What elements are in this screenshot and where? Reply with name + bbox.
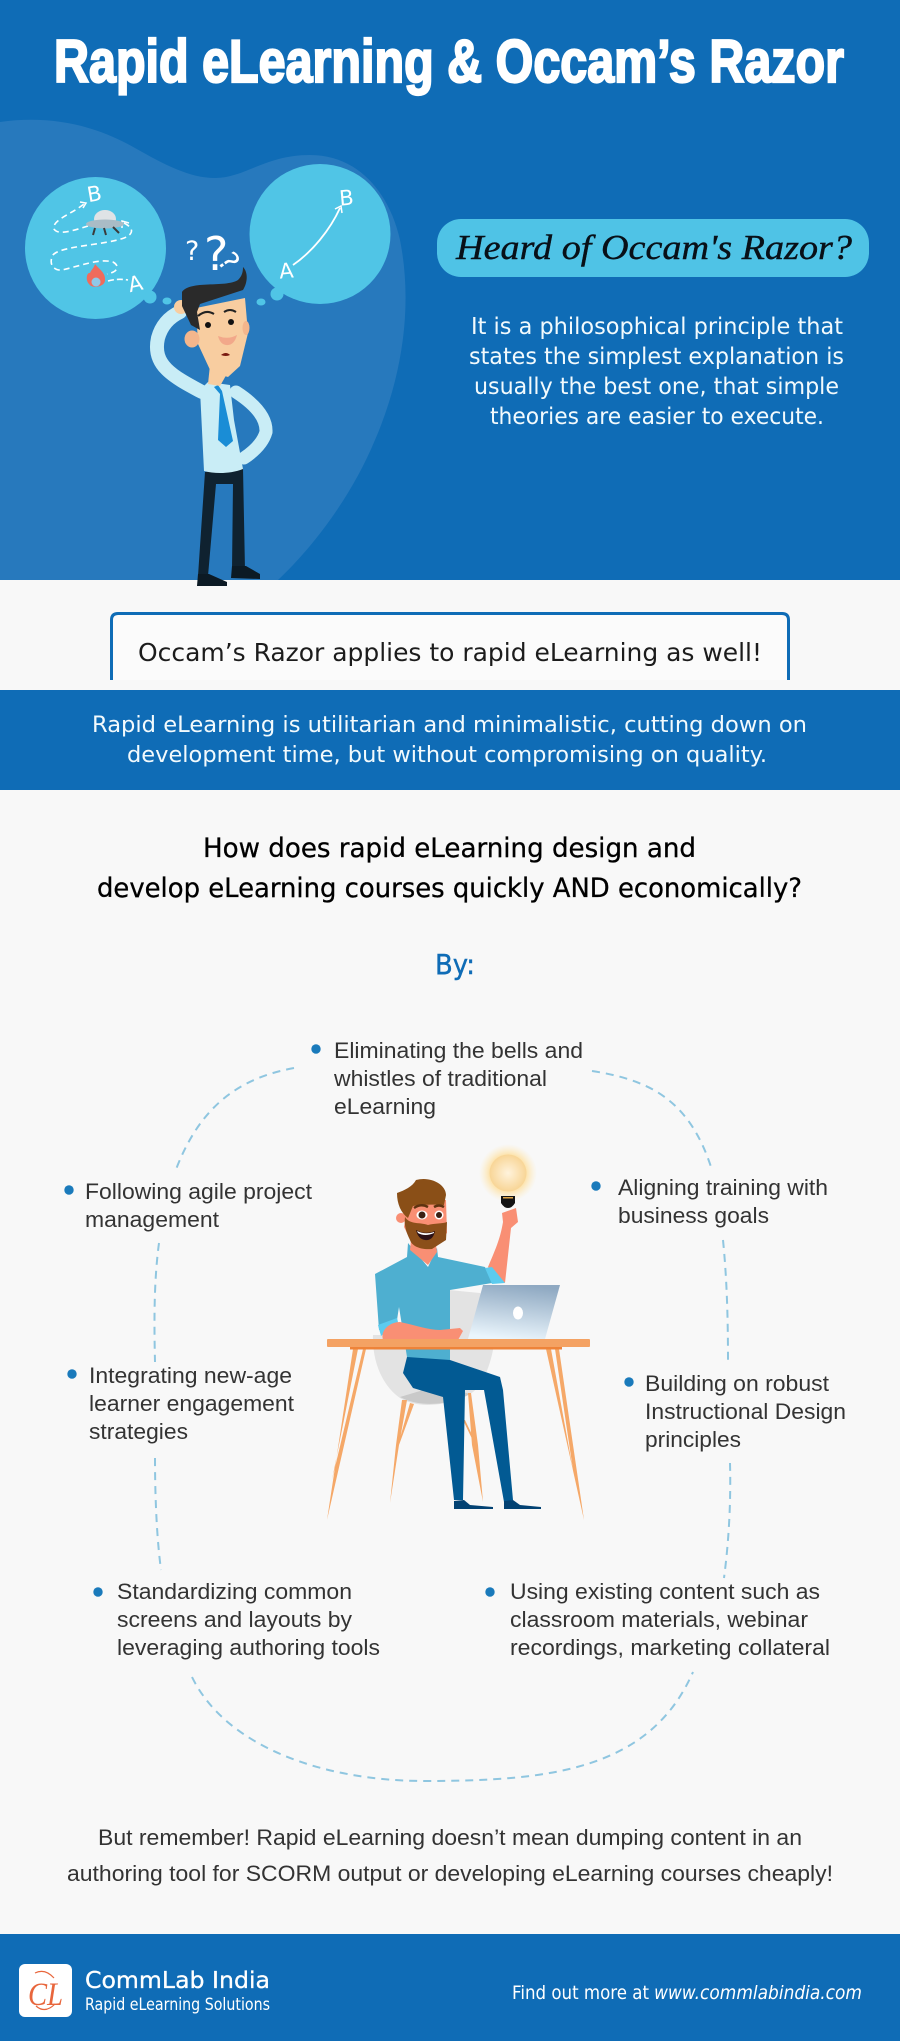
icon: question marks xyxy=(185,227,246,281)
icon: thought bubble simple path: A xyxy=(278,258,295,284)
list item: aligning xyxy=(591,1175,828,1228)
icon: flame xyxy=(87,264,105,287)
list item: integrating: strategies xyxy=(89,1419,188,1444)
text block: definition: states the simplest explanation is xyxy=(469,342,844,370)
panel: occam's razor tab: Occam’s Razor applies to rapid eLearning as well! xyxy=(138,638,762,667)
callout pill: Heard of Occam's Razor? xyxy=(455,228,853,267)
list item: standardizing: leveraging authoring tools xyxy=(117,1635,380,1660)
footer link text xyxy=(512,1982,862,2004)
shirt xyxy=(375,1243,492,1361)
list item: building: principles xyxy=(645,1427,741,1452)
list item: standardizing: Standardizing common xyxy=(117,1579,352,1604)
raised arm xyxy=(488,1208,518,1283)
panel: summary band xyxy=(0,690,900,790)
list item: agile: Following agile project xyxy=(85,1179,312,1204)
text block: closing note xyxy=(67,1825,833,1886)
list item: eliminating: whistles of traditional xyxy=(333,1066,547,1091)
head xyxy=(396,1179,447,1249)
arm on table xyxy=(382,1322,463,1340)
logo wordmark: CommLab India xyxy=(85,1968,270,1994)
list item: aligning: business goals xyxy=(618,1203,769,1228)
text block: definition: theories are easier to execute. xyxy=(490,402,824,430)
table legs xyxy=(327,1349,584,1520)
icon: commlab logo xyxy=(19,1964,72,2017)
list item: eliminating xyxy=(311,1038,583,1119)
text block: definition: It is a philosophical principle that xyxy=(471,312,843,340)
icon: thought bubble complicated path xyxy=(25,177,172,319)
chair xyxy=(373,1290,494,1503)
list item: building: Instructional Design xyxy=(645,1399,846,1424)
list item: standardizing: screens and layouts by xyxy=(117,1607,352,1632)
shoes xyxy=(454,1500,541,1509)
icon: question marks: ? xyxy=(204,227,228,281)
heading: question xyxy=(97,833,802,904)
icon: question marks: ? xyxy=(185,236,199,267)
list item: agile xyxy=(64,1179,312,1232)
list item: existing content: recordings, marketing collateral xyxy=(510,1635,830,1660)
list item: eliminating: Eliminating the bells and xyxy=(334,1038,583,1063)
laptop xyxy=(468,1285,560,1339)
table top xyxy=(327,1339,590,1347)
icon: thought bubble complicated path: A xyxy=(126,271,146,297)
heading: question: How does rapid eLearning design and xyxy=(203,833,696,864)
icon: thought bubble simple path xyxy=(250,164,390,306)
list item: existing content: Using existing content such as xyxy=(510,1579,820,1604)
logo wordmark xyxy=(85,1968,270,2015)
callout pill xyxy=(437,219,869,277)
list item: existing content: classroom materials, webinar xyxy=(510,1607,808,1632)
list item: aligning: Aligning training with xyxy=(618,1175,828,1200)
figure: confused man xyxy=(157,267,266,586)
list item: integrating: Integrating new-age xyxy=(89,1363,292,1388)
panel: occam's razor tab xyxy=(112,614,788,680)
footer link text: www.commlabindia.com xyxy=(654,1982,862,2004)
panel: summary band: Rapid eLearning is utilitarian and minimalistic, cutting down on xyxy=(92,712,807,738)
list item: agile: management xyxy=(85,1207,219,1232)
list item: building: Building on robust xyxy=(645,1371,829,1396)
heading: question: develop eLearning courses quickly AND economically? xyxy=(97,873,802,904)
icon: question marks: ? xyxy=(211,246,246,277)
list item: existing content xyxy=(485,1579,830,1660)
icon: thought bubble complicated path: B xyxy=(85,181,104,207)
list item: building xyxy=(624,1371,846,1452)
panel: footer xyxy=(0,1934,900,2041)
text block: closing note: authoring tool for SCORM output or developing eLearning courses cheaply! xyxy=(67,1861,833,1886)
figure: man at desk with light bulb xyxy=(327,1144,590,1520)
heading: by: By: xyxy=(435,948,475,981)
panel: header xyxy=(0,0,900,586)
logo wordmark: Rapid eLearning Solutions xyxy=(85,1995,270,2015)
list item: integrating: learner engagement xyxy=(89,1391,294,1416)
icon: thought bubble simple path: B xyxy=(338,185,355,211)
icon: commlab logo: CL xyxy=(28,1977,63,2013)
list item: standardizing xyxy=(93,1579,380,1660)
text block: definition xyxy=(469,312,844,430)
icon: ufo xyxy=(86,210,124,235)
text block: closing note: But remember! Rapid eLearning doesn’t mean dumping content in an xyxy=(98,1825,802,1850)
list item: eliminating: eLearning xyxy=(334,1094,436,1119)
panel: summary band: development time, but without compromising on quality. xyxy=(127,742,767,768)
pants xyxy=(403,1357,513,1502)
list item: integrating xyxy=(67,1363,294,1444)
dashed loop connector xyxy=(154,1068,730,1781)
text block: definition: usually the best one, that simple xyxy=(474,372,839,400)
neck xyxy=(410,1240,437,1265)
bulb xyxy=(479,1144,537,1208)
footer link text: Find out more at xyxy=(512,1982,649,2004)
background blob xyxy=(0,120,406,580)
